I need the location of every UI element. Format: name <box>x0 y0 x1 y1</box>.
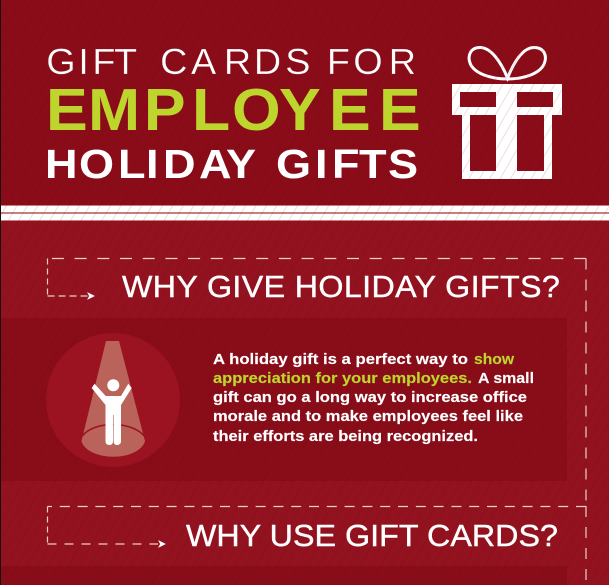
panel: why use band <box>1 566 567 585</box>
icon: person in spotlight <box>46 333 180 467</box>
icon: gift box <box>452 48 562 179</box>
dashed connector: second section <box>48 506 586 585</box>
text block: why give: A small <box>478 371 534 387</box>
text block: why give: gift can go a long way to increase office <box>213 390 527 406</box>
text block: why give <box>213 352 534 445</box>
header background <box>0 0 609 205</box>
text block: why give: morale and to make employees feel like <box>213 409 523 425</box>
text block: why give: appreciation for your employees. <box>213 371 472 387</box>
left page edge <box>0 0 1 585</box>
spotlight circle <box>46 333 180 467</box>
text block: why give: their efforts are being recognized. <box>213 429 478 445</box>
stage ring <box>82 424 144 436</box>
title line: gift cards for: GIFT CARDS FOR <box>46 42 416 82</box>
heading: why give holiday gifts: WHY GIVE HOLIDAY GIFTS? <box>122 269 560 304</box>
person figure <box>92 379 132 445</box>
text block: why give: show <box>474 352 515 368</box>
heading: why use gift cards: WHY USE GIFT CARDS? <box>186 518 558 553</box>
spotlight beam <box>82 341 145 457</box>
title line: employee: EMPLOYEE <box>46 77 421 143</box>
double white divider band <box>0 205 609 221</box>
title <box>45 42 421 188</box>
dashed connector: first section <box>48 258 586 506</box>
text block: why give: A holiday gift is a perfect way to <box>213 352 468 368</box>
panel: why give band <box>1 318 567 481</box>
body background <box>0 221 609 585</box>
title line: holiday gifts: HOLIDAY GIFTS <box>45 142 418 188</box>
